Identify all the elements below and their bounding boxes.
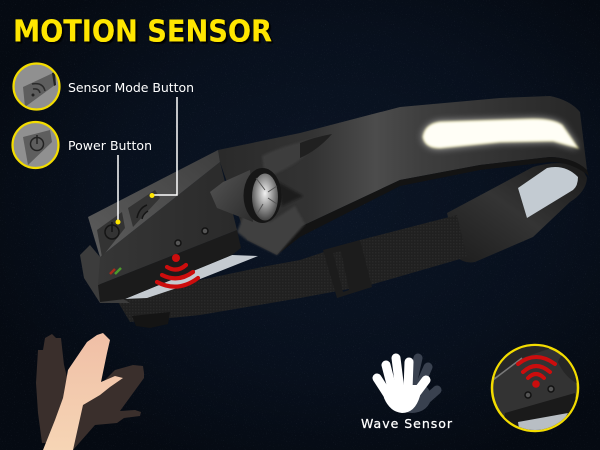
LED glow (423, 119, 578, 148)
left fabric band (80, 245, 130, 303)
callout line: sensor mode button (150, 97, 177, 198)
rear strap right section (447, 163, 587, 262)
label: power button: Power Button (68, 138, 152, 153)
shadow hand upright (36, 334, 67, 443)
inset: sensor close-up (490, 344, 580, 432)
body lower band (98, 230, 241, 302)
body front face (98, 162, 237, 285)
shadow hand tilted (70, 365, 144, 450)
body top panel (88, 150, 220, 257)
icon: power button (12, 122, 58, 168)
lower lamp housing (237, 206, 305, 255)
label: wave sensor: Wave Sensor (361, 416, 453, 431)
icon: wave hand (377, 358, 437, 413)
screws (175, 228, 208, 246)
sensor mode button (128, 190, 160, 227)
icon: red sensor waves (157, 254, 198, 287)
hands waving (36, 333, 144, 450)
buckle left (132, 312, 170, 328)
housing recess (262, 137, 322, 178)
front sensor LED strip (125, 255, 258, 299)
headlamp (80, 96, 589, 328)
label: sensor mode button: Sensor Mode Button (68, 80, 194, 95)
icon: sensor mode button (14, 64, 60, 110)
lamp lens (252, 174, 278, 220)
title: MOTION SENSOR (13, 14, 272, 50)
power button (97, 212, 125, 257)
skin hand (43, 333, 123, 450)
callout line: power button (116, 155, 120, 224)
webbing strap (118, 215, 467, 322)
lamp neck (210, 170, 253, 222)
main strap (218, 96, 587, 255)
strap lower rim (277, 157, 589, 255)
shadow beside lamp (278, 182, 303, 206)
lamp bezel (244, 168, 282, 223)
white pad (518, 167, 578, 218)
LED light bar (423, 119, 578, 148)
strap groove (300, 134, 332, 158)
logo (110, 268, 121, 274)
buckle right (323, 240, 372, 298)
